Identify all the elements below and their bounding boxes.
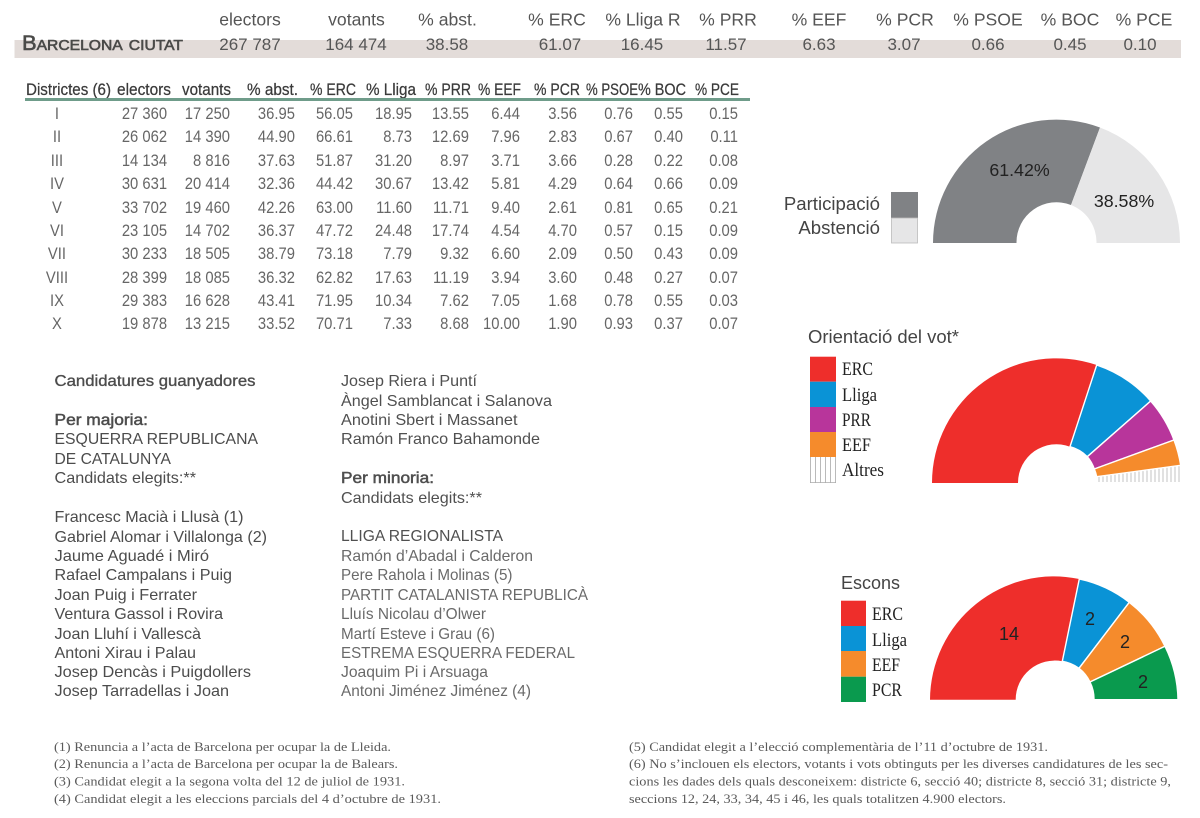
table rows: 4.54 — [491, 222, 520, 240]
table rows: 0.27 — [654, 269, 683, 287]
text block: winning candidates left: Josep Tarradellas i Joan — [54, 683, 229, 700]
table header: electors — [117, 80, 171, 99]
table rows: 0.93 — [604, 315, 633, 333]
table: districts — [25, 80, 750, 333]
text block: winning candidates right: Martí Esteve i Grau (6) — [341, 626, 495, 643]
city header row: % ERC — [528, 10, 586, 30]
table rows: 0.76 — [604, 105, 633, 123]
table rows: 0.08 — [709, 152, 738, 170]
seats legend: Lliga — [872, 630, 907, 651]
table rows: 0.67 — [604, 128, 633, 146]
table rows: 26 062 — [122, 128, 167, 146]
city values row: 6.63 — [802, 35, 836, 54]
city header row: % PCR — [876, 10, 934, 30]
city values row: 61.07 — [539, 35, 581, 54]
city band — [14, 40, 1181, 58]
panel: city totals — [14, 10, 1181, 58]
orientation legend: EEF — [842, 435, 871, 456]
table rows: 31.20 — [375, 152, 412, 170]
text block: winning candidates left — [54, 373, 267, 700]
table rows: 0.43 — [654, 245, 683, 263]
table rows: 14 134 — [122, 152, 167, 170]
seats heading: Escons — [841, 573, 900, 593]
table rows: 8.97 — [440, 152, 469, 170]
table rows: 51.87 — [316, 152, 353, 170]
table rows: 0.07 — [709, 269, 738, 287]
table rows: IX — [50, 292, 64, 310]
table rows: 11.71 — [433, 199, 469, 217]
table rows: 17 250 — [185, 105, 230, 123]
table rows: 71.95 — [316, 292, 353, 310]
city header row: % PCE — [1116, 10, 1172, 30]
chart: participation — [784, 120, 1180, 243]
table rows: IV — [50, 175, 64, 193]
table rows: 17.63 — [375, 269, 412, 287]
text block: winning candidates left: Per majoria: — [54, 412, 148, 429]
table header: % PSOE — [586, 80, 638, 99]
abstention value: 38.58% — [1094, 191, 1154, 211]
table header: % Lliga — [366, 80, 416, 99]
text block: winning candidates right: Pere Rahola i Molinas (5) — [341, 567, 512, 584]
city values row: 0.66 — [971, 35, 1005, 54]
table rows: 7.05 — [491, 292, 520, 310]
participation legend: Abstenció — [798, 217, 880, 238]
text block: winning candidates right: Candidats elegits:** — [341, 490, 482, 507]
seats values — [999, 609, 1148, 692]
table rows: 0.78 — [604, 292, 633, 310]
table rows: 33 702 — [122, 199, 167, 217]
table rows: 36.95 — [258, 105, 295, 123]
seats values: 2 — [1138, 672, 1148, 692]
table rows: 2.09 — [548, 245, 577, 263]
table rows: 43.41 — [258, 292, 295, 310]
table header: Districtes (6) — [26, 80, 111, 99]
text block: winning candidates left: Gabriel Alomar i Villalonga (2) — [54, 529, 267, 546]
city header row: % BOC — [1041, 10, 1100, 30]
text block: winning candidates left: Antoni Xirau i Palau — [54, 645, 196, 662]
table rows: V — [52, 199, 62, 217]
table rows: 44.90 — [258, 128, 295, 146]
table rows: 56.05 — [316, 105, 353, 123]
footnotes right — [629, 739, 1171, 806]
table rows: 29 383 — [122, 292, 167, 310]
table rows: 38.79 — [258, 245, 295, 263]
orientation legend: ERC — [842, 359, 873, 380]
table rows: 7.79 — [383, 245, 412, 263]
table rows: 8 816 — [193, 152, 230, 170]
orientation slices — [932, 358, 1181, 483]
text block: winning candidates left: Francesc Macià i Llusà (1) — [54, 509, 243, 526]
table rows: 0.11 — [710, 128, 738, 146]
table rows: 10.00 — [483, 315, 520, 333]
table rows: 0.57 — [604, 222, 633, 240]
table rows: 0.28 — [604, 152, 633, 170]
table rows: 6.60 — [491, 245, 520, 263]
text block: winning candidates left: DE CATALUNYA — [54, 451, 171, 468]
table rows: 44.42 — [316, 175, 353, 193]
table rows: 4.29 — [548, 175, 577, 193]
city header row: votants — [328, 10, 385, 30]
city header row: electors — [219, 10, 281, 30]
table rows: 5.81 — [491, 175, 520, 193]
table rows: 73.18 — [316, 245, 353, 263]
seats legend: ERC — [872, 604, 903, 625]
table rows: 0.81 — [604, 199, 633, 217]
table rows: 0.22 — [654, 152, 683, 170]
text block: winning candidates right: Per minoria: — [341, 470, 434, 487]
table rows: 33.52 — [258, 315, 295, 333]
table header: % PCE — [695, 80, 739, 99]
footnotes right: (6) No s’inclouen els electors, votants i vots obtinguts per les diverses candidatures de les sec- — [629, 756, 1168, 771]
table header: % EEF — [478, 80, 521, 99]
seats legend: EEF — [872, 655, 900, 676]
participation value: 61.42% — [989, 160, 1050, 180]
table rows: 18 085 — [185, 269, 230, 287]
text block: winning candidates right: Anotini Sbert i Massanet — [341, 412, 518, 429]
text block: winning candidates right: PARTIT CATALANISTA REPUBLICÀ — [341, 585, 588, 604]
table rows: 3.94 — [491, 269, 520, 287]
table rows: VII — [48, 245, 66, 263]
table rows: 3.60 — [548, 269, 577, 287]
table rows: 0.40 — [654, 128, 683, 146]
footnotes left — [54, 739, 441, 806]
table rows: 0.55 — [654, 105, 683, 123]
table rows: 0.09 — [709, 222, 738, 240]
table rows: 0.37 — [654, 315, 683, 333]
table rows: 0.65 — [654, 199, 683, 217]
city header row: % abst. — [418, 10, 477, 30]
text block: winning candidates right: Josep Riera i Puntí — [341, 373, 478, 390]
participation legend — [784, 192, 918, 243]
table rows: 16 628 — [185, 292, 230, 310]
city values row: 16.45 — [621, 35, 663, 54]
table rows: 63.00 — [316, 199, 353, 217]
text block: winning candidates right: Joaquim Pi i Arsuaga — [341, 664, 488, 681]
text block: winning candidates right: LLIGA REGIONALISTA — [341, 528, 503, 545]
text block: winning candidates left: Candidatures guanyadores — [54, 373, 256, 390]
table rows: 20 414 — [185, 175, 230, 193]
table rows: 18.95 — [375, 105, 412, 123]
table rows: 0.48 — [604, 269, 633, 287]
table rows: 66.61 — [316, 128, 353, 146]
table rows: 0.09 — [709, 245, 738, 263]
city header row: % EEF — [792, 10, 847, 30]
abstention slice — [1071, 128, 1180, 243]
others hatch — [1099, 466, 1179, 482]
table rows: 2.61 — [548, 199, 577, 217]
table rows: 23 105 — [122, 222, 167, 240]
table rows: 62.82 — [316, 269, 353, 287]
table rows: 3.71 — [491, 152, 520, 170]
table rows: 30 631 — [122, 175, 167, 193]
table header: % PCR — [534, 80, 580, 99]
seats slices — [930, 576, 1178, 700]
table rows — [46, 105, 738, 333]
footnotes right: cions les dades dels quals desconeixem: districte 6, secció 40; districte 8, secció 31; districte 9, — [629, 774, 1171, 788]
table rows: 1.68 — [548, 292, 577, 310]
footnotes right: seccions 12, 24, 33, 34, 45 i 46, les quals totalitzen 4.900 electors. — [629, 791, 1006, 806]
city values row: 3.07 — [887, 35, 921, 54]
table rows: 0.55 — [654, 292, 683, 310]
text block: winning candidates right: Lluís Nicolau d’Olwer — [341, 606, 487, 623]
table rows: II — [53, 128, 61, 146]
text block: winning candidates left: Ventura Gassol i Rovira — [54, 606, 223, 623]
table rows: 28 399 — [122, 269, 167, 287]
footnotes left: (4) Candidat elegit a les eleccions parcials del 4 d’octubre de 1931. — [54, 791, 441, 806]
city values row — [219, 35, 1157, 54]
table rows: 13.42 — [432, 175, 469, 193]
table rows: 32.36 — [258, 175, 295, 193]
table rows: 3.56 — [548, 105, 577, 123]
table rows: 0.66 — [654, 175, 683, 193]
table rows: 70.71 — [316, 315, 353, 333]
text block: winning candidates right: Ramón Franco Bahamonde — [341, 431, 540, 448]
seats values: 2 — [1085, 609, 1095, 629]
footnotes left: (2) Renuncia a l’acta de Barcelona per ocupar la de Balears. — [54, 756, 398, 771]
table rows: 0.21 — [709, 199, 738, 217]
text block: winning candidates right: Ramón d’Abadal i Calderon — [341, 548, 533, 565]
text block: winning candidates left: Joan Lluhí i Vallescà — [54, 626, 201, 643]
table rows: 7.62 — [440, 292, 469, 310]
table rows: 7.33 — [383, 315, 412, 333]
text block: winning candidates right: Àngel Samblancat i Salanova — [341, 391, 552, 410]
table rows: 2.83 — [548, 128, 577, 146]
table rows: 13 215 — [185, 315, 230, 333]
table header — [26, 80, 739, 99]
city values row: 0.45 — [1053, 35, 1087, 54]
table rows: 37.63 — [258, 152, 295, 170]
table rows: 1.90 — [548, 315, 577, 333]
orientation heading: Orientació del vot* — [808, 326, 959, 347]
text block: winning candidates left: Josep Dencàs i Puigdollers — [54, 664, 251, 681]
seats values: 2 — [1120, 632, 1130, 652]
footnotes right: (5) Candidat elegit a l’elecció complementària de l’11 d’octubre de 1931. — [629, 739, 1048, 754]
table header: % abst. — [247, 80, 298, 99]
city values row: 164 474 — [325, 35, 387, 54]
table rows: III — [51, 152, 63, 170]
footnotes left: (1) Renuncia a l’acta de Barcelona per ocupar la de Lleida. — [54, 739, 391, 754]
text block: winning candidates left: Jaume Aguadé i Miró — [54, 548, 209, 565]
table rows: 11.60 — [376, 199, 412, 217]
table rows: 7.96 — [491, 128, 520, 146]
participation legend: Participació — [784, 193, 880, 214]
table rows: 27 360 — [122, 105, 167, 123]
city values row: 38.58 — [426, 35, 468, 54]
seats values: 14 — [999, 624, 1019, 644]
city name: Barcelona ciutat — [22, 32, 183, 55]
city values row: 267 787 — [219, 35, 281, 54]
table rows: 0.50 — [604, 245, 633, 263]
table rows: 18 505 — [185, 245, 230, 263]
table rows: 30 233 — [122, 245, 167, 263]
city values row: 11.57 — [705, 35, 747, 54]
table rows: VIII — [46, 269, 68, 287]
table rows: 13.55 — [432, 105, 469, 123]
text block: winning candidates right: Antoni Jiménez Jiménez (4) — [341, 683, 531, 700]
city values row: 0.10 — [1123, 35, 1157, 54]
city header row — [219, 10, 1172, 30]
table rows: 0.07 — [709, 315, 738, 333]
table rows: 24.48 — [375, 222, 412, 240]
table header: % PRR — [425, 80, 471, 99]
text block: winning candidates right — [341, 373, 588, 700]
table rule — [25, 98, 750, 101]
orientation legend: Altres — [842, 460, 884, 481]
table rows: 9.40 — [491, 199, 520, 217]
orientation legend — [810, 357, 884, 483]
table rows: 0.09 — [709, 175, 738, 193]
seats legend: PCR — [872, 680, 902, 701]
table rows: 47.72 — [316, 222, 353, 240]
table rows: 4.70 — [548, 222, 577, 240]
table rows: I — [55, 105, 59, 123]
seats legend — [841, 601, 907, 702]
chart: seats — [841, 573, 1178, 702]
chart: vote orientation — [808, 326, 1181, 483]
orientation legend: PRR — [842, 410, 871, 431]
text block: winning candidates right: ESTREMA ESQUERRA FEDERAL — [341, 645, 575, 662]
text block: winning candidates left: Joan Puig i Ferrater — [54, 587, 198, 604]
table rows: 19 878 — [122, 315, 167, 333]
table rows: 10.34 — [375, 292, 412, 310]
table rows: 9.32 — [440, 245, 469, 263]
footnotes left: (3) Candidat elegit a la segona volta del 12 de juliol de 1931. — [54, 774, 405, 788]
text block: winning candidates left: Rafael Campalans i Puig — [54, 567, 232, 584]
table rows: 36.37 — [258, 222, 295, 240]
table rows: 0.15 — [654, 222, 683, 240]
table rows: 30.67 — [375, 175, 412, 193]
city header row: % Lliga R — [605, 10, 681, 30]
table rows: 19 460 — [185, 199, 230, 217]
table rows: 0.03 — [709, 292, 738, 310]
participation slice — [933, 120, 1100, 243]
table rows: 8.73 — [383, 128, 412, 146]
table rows: 0.15 — [709, 105, 738, 123]
table rows: 0.64 — [604, 175, 633, 193]
text block: winning candidates left: Candidats elegits:** — [54, 470, 196, 487]
table rows: 14 390 — [185, 128, 230, 146]
orientation legend: Lliga — [842, 385, 877, 406]
text block: winning candidates left: ESQUERRA REPUBLICANA — [54, 431, 258, 448]
table rows: 8.68 — [440, 315, 469, 333]
table header: % BOC — [638, 80, 686, 99]
table rows: 42.26 — [258, 199, 295, 217]
table rows: VI — [50, 222, 64, 240]
table rows: 14 702 — [185, 222, 230, 240]
table header: votants — [182, 80, 231, 99]
city header row: % PSOE — [953, 10, 1023, 30]
table rows: 36.32 — [258, 269, 295, 287]
table header: % ERC — [310, 80, 356, 99]
table rows: 17.74 — [432, 222, 469, 240]
city header row: % PRR — [699, 10, 757, 30]
table rows: X — [52, 315, 62, 333]
table rows: 3.66 — [548, 152, 577, 170]
table rows: 12.69 — [432, 128, 469, 146]
table rows: 11.19 — [433, 269, 469, 287]
table rows: 6.44 — [491, 105, 520, 123]
